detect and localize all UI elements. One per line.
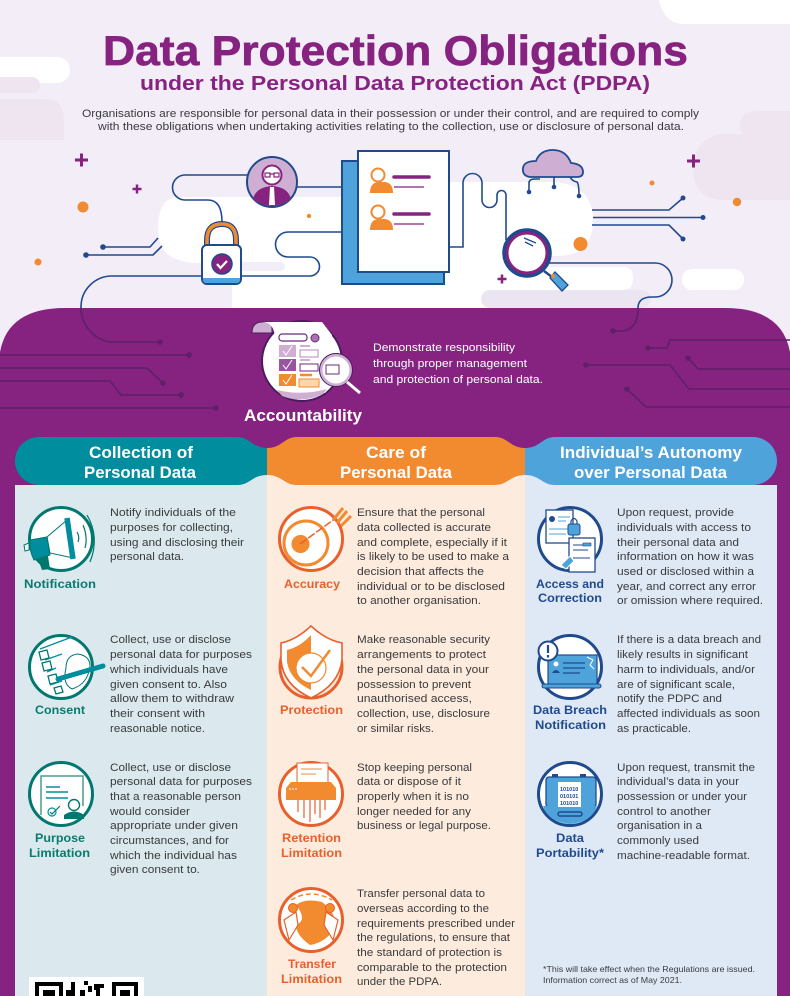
item: access and correction: Access and	[536, 577, 604, 591]
item: protection: Protection	[280, 703, 343, 717]
heading: individual's autonomy	[525, 437, 777, 485]
heading: collection of personal data	[15, 437, 267, 485]
item: access and correction: Correction	[538, 591, 602, 605]
item: consent: given consent to. Also	[110, 679, 227, 691]
item: purpose limitation: which the individual has	[109, 850, 238, 862]
item: data portability	[536, 762, 755, 862]
item: purpose limitation: would consider	[109, 806, 190, 818]
item: retention limitation: longer needed for any	[357, 806, 472, 818]
footnote: *This will take effect when the Regulations are issued.	[543, 964, 755, 974]
item: protection: collection, use, disclosure	[357, 708, 490, 720]
heading: care of personal data: Personal Data	[340, 463, 453, 482]
item: accuracy: individual or to be disclosed	[357, 581, 505, 593]
intro text: Organisations are responsible for personal data in their possession or under their control, and are required to comply	[82, 108, 700, 120]
item: data portability: Data	[556, 831, 584, 845]
item: transfer limitation	[280, 888, 515, 988]
subtitle: under the Personal Data Protection Act (PDPA)	[140, 72, 650, 95]
item: access and correction: information on how it was	[617, 551, 755, 563]
item: purpose limitation	[29, 762, 253, 876]
background clouds	[0, 0, 790, 308]
item: notification: using and disclosing their	[110, 537, 244, 549]
item: transfer limitation: under the PDPA.	[357, 976, 442, 988]
icon: briefcase with binary document: 010101	[560, 794, 578, 800]
item: purpose limitation: Limitation	[29, 846, 90, 860]
icon: briefcase with binary document: 101010	[560, 787, 578, 793]
item: data portability: individual’s data in your	[617, 776, 739, 788]
item: notification: purposes for collecting,	[110, 522, 233, 534]
item: consent: personal data for purposes	[110, 649, 253, 661]
item: purpose limitation: personal data for purposes	[110, 776, 253, 788]
item: accuracy: is likely to be used to make a	[357, 551, 510, 563]
item: consent: reasonable notice.	[110, 723, 205, 735]
item: purpose limitation: Purpose	[35, 831, 85, 845]
item: transfer limitation: comparable to the protection	[357, 962, 507, 974]
item: protection	[280, 626, 491, 735]
item: access and correction: Upon request, provide	[617, 507, 734, 519]
item: access and correction: or omission where required.	[617, 595, 763, 607]
icon: laptop with alert	[538, 636, 602, 698]
item: purpose limitation: that a reasonable person	[110, 791, 241, 803]
heading: care of personal data: Care of	[366, 443, 426, 462]
purple main panel	[0, 308, 790, 996]
accountability description: and protection of personal data.	[373, 374, 543, 386]
item: accuracy	[280, 507, 510, 607]
item: protection: the personal data in your	[357, 664, 489, 676]
heading: individual's autonomy: Individual’s Autonomy	[560, 443, 743, 462]
item: transfer limitation: Transfer	[288, 957, 336, 971]
heading: collection of personal data: Personal Data	[84, 463, 197, 482]
item: accuracy: Accuracy	[284, 577, 340, 591]
item: retention limitation: Retention	[282, 831, 341, 845]
icon: documents with lock	[538, 508, 602, 572]
item: retention limitation: Stop keeping personal	[357, 762, 472, 774]
item: consent: which individuals have	[109, 664, 228, 676]
item: transfer limitation: the regulations, to ensure that	[357, 932, 510, 944]
icon: globe with pins	[280, 888, 342, 952]
decorative plus signs and dots	[34, 154, 741, 284]
item: purpose limitation: circumstances, and for	[110, 835, 229, 847]
item: data breach notification: harm to individuals, and/or	[617, 664, 755, 676]
heading: individual's autonomy: over Personal Data	[574, 463, 728, 482]
item: data breach notification: Notification	[535, 718, 606, 732]
accountability description: Demonstrate responsibility	[373, 342, 516, 354]
item: data portability: control to another	[617, 806, 711, 818]
item: purpose limitation: given consent to.	[110, 864, 200, 876]
item: protection: possession to prevent	[357, 679, 471, 691]
title: Data Protection Obligations	[103, 27, 688, 74]
item: data portability: Portability*	[536, 846, 604, 860]
accountability description: through proper management	[373, 358, 527, 370]
item: transfer limitation: overseas according to the	[357, 903, 489, 915]
item: protection: Make reasonable security	[357, 634, 491, 646]
item: consent: Collect, use or disclose	[110, 634, 231, 646]
item: data portability: organisation in a	[617, 820, 703, 832]
icon: padlock	[202, 224, 241, 284]
item: transfer limitation: Transfer personal data to	[357, 888, 485, 900]
item: accuracy: decision that affects the	[357, 566, 484, 578]
item: accuracy: Ensure that the personal	[357, 507, 485, 519]
item: retention limitation: properly when it is no	[357, 791, 469, 803]
icon: briefcase with binary document	[538, 762, 602, 826]
accountability heading: Accountability	[244, 406, 363, 425]
icon: shredder	[280, 762, 342, 826]
item: notification: Notification	[24, 577, 96, 591]
item: accuracy: and complete, especially if it	[357, 537, 507, 549]
item: data breach notification	[533, 634, 761, 735]
item: data breach notification: are of significant scale,	[617, 679, 735, 691]
item: access and correction: their personal data and	[617, 537, 739, 549]
item: retention limitation: data or dispose of it	[357, 776, 461, 788]
item: consent: their consent with	[110, 708, 205, 720]
item: data portability: possession or under your	[617, 791, 747, 803]
icon: stamped document	[30, 762, 92, 826]
icon: checklist and pen	[30, 636, 103, 698]
QR code	[29, 977, 144, 996]
item: protection: unauthorised access,	[357, 693, 472, 705]
item: data breach notification: If there is a data breach and	[617, 634, 761, 646]
item: notification: Notify individuals of the	[110, 507, 236, 519]
item: data breach notification: likely results in significant	[617, 649, 748, 661]
item: transfer limitation: the standard of protection is	[357, 947, 503, 959]
item: notification	[24, 507, 244, 591]
item: data portability: Upon request, transmit the	[617, 762, 755, 774]
icon: shield	[280, 626, 342, 698]
icon: documents with people	[342, 151, 449, 284]
accountability description	[373, 342, 543, 386]
item: transfer limitation: requirements prescribed under	[357, 918, 515, 930]
footnote: Information correct as of May 2021.	[543, 975, 682, 985]
item: data breach notification: Data Breach	[533, 703, 607, 717]
item: retention limitation: business or legal purpose.	[357, 820, 491, 832]
item: data breach notification: as practicable.	[617, 723, 691, 735]
item: retention limitation: Limitation	[281, 846, 342, 860]
icon: cloud	[523, 150, 583, 198]
panel: autonomy column background	[525, 470, 777, 996]
item: access and correction: year, and correct any error	[617, 581, 756, 593]
heading: collection of personal data: Collection of	[89, 443, 193, 462]
item: transfer limitation: Limitation	[281, 972, 342, 986]
item: consent: allow them to withdraw	[110, 693, 234, 705]
icon: megaphone	[24, 508, 94, 570]
item: retention limitation	[280, 762, 491, 860]
item: data breach notification: notify the PDPC and	[617, 693, 722, 705]
item: purpose limitation: Collect, use or disclose	[110, 762, 231, 774]
icon: briefcase with binary document: 101010	[560, 801, 578, 807]
panel: care column background	[267, 470, 525, 996]
item: data portability: commonly used	[617, 835, 699, 847]
intro text: with these obligations when undertaking activities relating to the collection, use or disclosure of personal data.	[97, 121, 684, 133]
item: protection: or similar risks.	[357, 723, 434, 735]
item: consent: Consent	[35, 703, 85, 717]
icon: target	[280, 508, 351, 570]
item: access and correction	[536, 507, 763, 607]
item: data breach notification: affected individuals as soon	[617, 708, 760, 720]
icon: person	[247, 157, 297, 207]
item: protection: arrangements to protect	[357, 649, 486, 661]
intro text	[82, 108, 700, 133]
item: consent	[30, 634, 253, 735]
item: accuracy: data collected is accurate	[357, 522, 491, 534]
icon: magnifying glass	[505, 231, 568, 291]
item: data portability: machine-readable format.	[617, 850, 750, 862]
circuit traces on purple panel	[0, 328, 790, 411]
item: accuracy: to another organisation.	[357, 595, 481, 607]
item: purpose limitation: appropriate under given	[110, 820, 238, 832]
item: notification: personal data.	[110, 551, 184, 563]
item: access and correction: used or disclosed within a	[617, 566, 755, 578]
item: access and correction: individuals with access to	[617, 522, 751, 534]
footnote	[543, 964, 755, 985]
heading: care of personal data	[267, 437, 525, 485]
circuit wires in illustration	[81, 174, 706, 342]
panel: collection column background	[15, 470, 267, 996]
icon: accountability scroll	[252, 321, 360, 401]
